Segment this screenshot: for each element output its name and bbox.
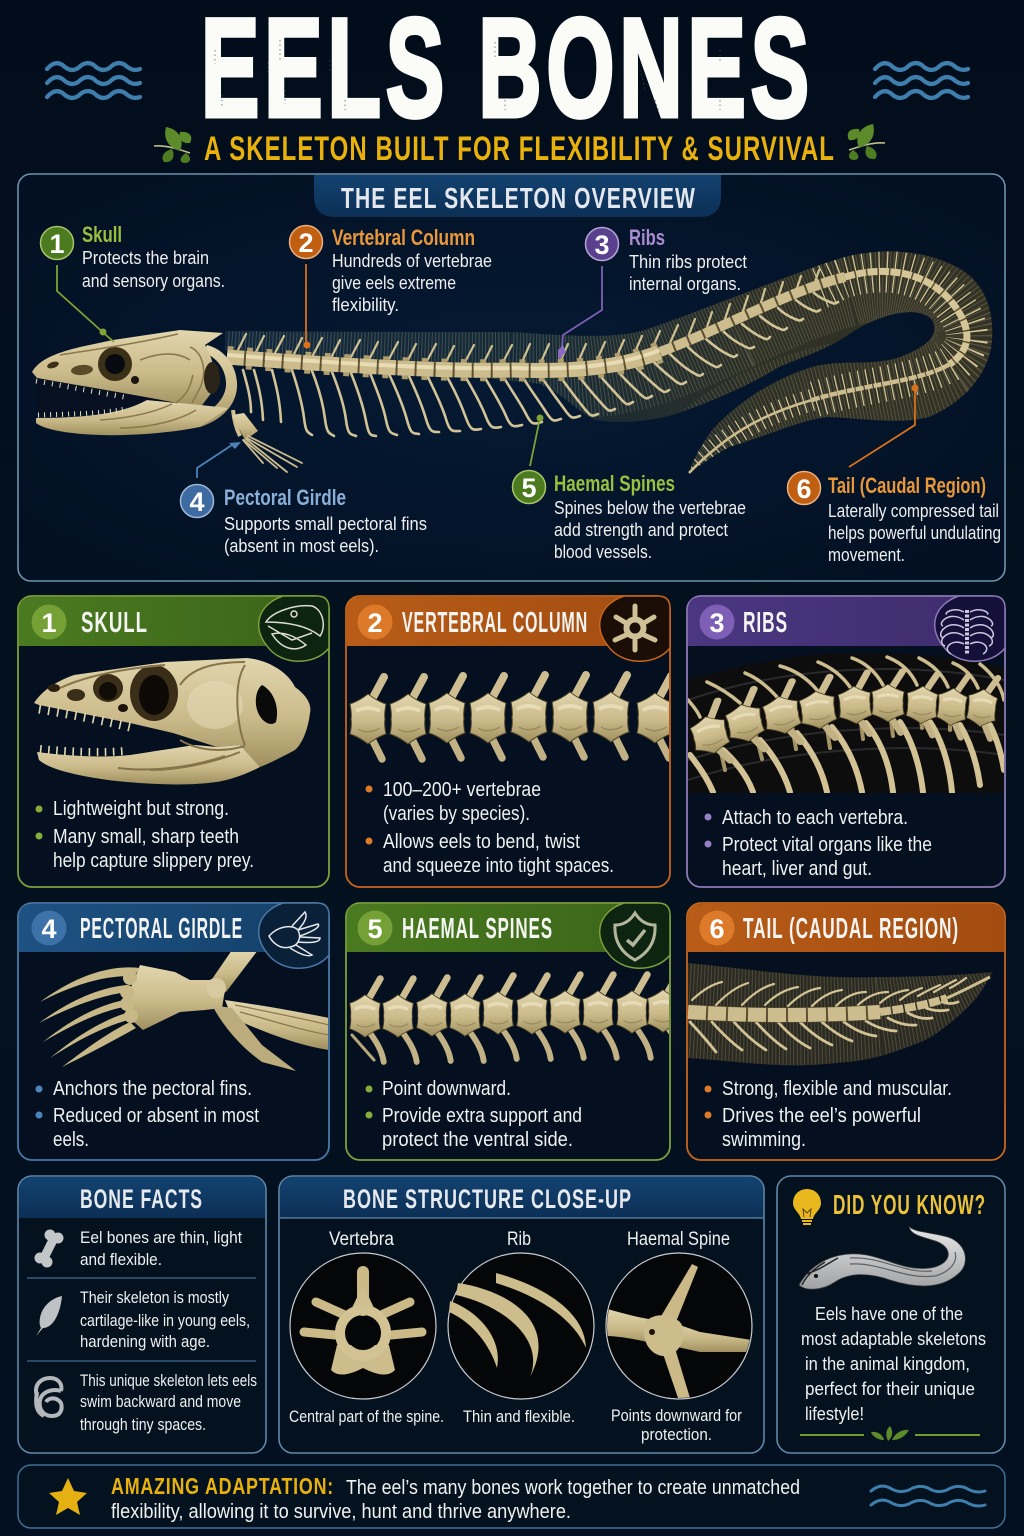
panel: skull card: 1 [41, 608, 57, 638]
did you know text: lifestyle! [805, 1404, 864, 1424]
pectoral image [39, 950, 329, 1071]
icon: banner waves [871, 1486, 985, 1506]
callout 6: tail: 6 [796, 474, 812, 504]
panel: vertebral column card [346, 596, 673, 887]
bullets: haemal spines: Provide extra support and [382, 1105, 582, 1127]
callout 1: skull: 1 [49, 229, 65, 259]
icon: eel [799, 1226, 965, 1289]
callout 1: skull: and sensory organs. [82, 271, 225, 291]
panel: haemal spines card: 5 [367, 914, 383, 944]
bullets: haemal spines: Point downward. [382, 1078, 511, 1100]
icon: leaves left [154, 127, 191, 163]
fact 3: through tiny spaces. [80, 1415, 206, 1434]
vertebrae image [350, 675, 673, 759]
pectoral girdle [232, 410, 302, 472]
vertebra close-up: Vertebra [329, 1229, 394, 1250]
heading: bone structure: BONE STRUCTURE CLOSE-UP [343, 1184, 632, 1214]
heading: vertebral column: VERTEBRAL COLUMN [402, 607, 588, 639]
haemal image [350, 974, 682, 1062]
bullets: pectoral girdle: eels. [53, 1129, 89, 1151]
panel: bone structure close-up [279, 1176, 764, 1453]
heading: skull: SKULL [81, 607, 148, 639]
callout 1: skull [40, 222, 225, 342]
vertebra close-up [289, 1229, 444, 1426]
bullets: skull: Lightweight but strong. [53, 798, 229, 820]
heading: bone facts: BONE FACTS [80, 1184, 203, 1214]
bullets: ribs [704, 807, 932, 880]
callout 3: ribs: Ribs [629, 225, 665, 250]
panel: skeleton overview [18, 174, 1005, 581]
fact 3: This unique skeleton lets eels [80, 1371, 257, 1390]
bullets: skull: Many small, sharp teeth [53, 826, 239, 848]
fact 2: Their skeleton is mostly [80, 1288, 229, 1307]
icon: bulb [793, 1189, 821, 1224]
callout 3: ribs: internal organs. [629, 274, 741, 294]
bullets: vertebral column: and squeeze into tight spaces. [383, 855, 614, 877]
icon: leaves right [848, 124, 885, 160]
bullets: pectoral girdle: Reduced or absent in most [53, 1105, 259, 1127]
panel: vertebral column card: 2 [367, 608, 383, 638]
eel skeleton [32, 251, 992, 473]
icon: coil [36, 1378, 62, 1416]
panel: haemal spines card [346, 903, 682, 1160]
did you know text: perfect for their unique [805, 1379, 975, 1399]
icon: feather [36, 1296, 62, 1336]
banner text: AMAZING ADAPTATION: [111, 1473, 334, 1499]
icon: fin [269, 912, 320, 956]
heading: overview: THE EEL SKELETON OVERVIEW [341, 183, 696, 215]
skull [32, 330, 237, 435]
callout 5: haemal spines [512, 414, 746, 562]
fact 2: cartilage-like in young eels, [80, 1311, 250, 1330]
tail image [688, 963, 993, 1065]
callout 6: tail: movement. [828, 545, 905, 565]
did you know text: Eels have one of the [815, 1304, 963, 1324]
neural spines [237, 270, 819, 362]
heading: ribs: RIBS [743, 607, 788, 639]
bullets: vertebral column: 100–200+ vertebrae [383, 779, 541, 801]
rib close-up: Rib [507, 1229, 531, 1250]
panel: did you know [777, 1176, 1005, 1453]
icon: skull line drawing [266, 606, 323, 649]
callout 2: vertebral column: give eels extreme [332, 273, 456, 293]
callout 6: tail: Laterally compressed tail [828, 501, 999, 521]
callout 3: ribs: Thin ribs protect [629, 252, 747, 272]
icon: divider leaves [871, 1426, 909, 1441]
panel: pectoral girdle card [18, 903, 329, 1160]
bullets: skull [36, 798, 254, 872]
bullets: pectoral girdle: Anchors the pectoral fins. [53, 1078, 252, 1100]
did you know text [801, 1304, 986, 1424]
heading: haemal spines: HAEMAL SPINES [402, 913, 553, 945]
heading: overview [314, 175, 721, 217]
waves right [875, 63, 968, 98]
bullets: tail: Strong, flexible and muscular. [722, 1078, 952, 1100]
icon: vertebra [615, 606, 655, 650]
icon: bone [34, 1230, 64, 1268]
haemal spine close-up: Points downward for [611, 1407, 742, 1425]
bullets: vertebral column: Allows eels to bend, twist [383, 831, 580, 853]
haemal spine close-up [604, 1229, 752, 1444]
callout 3: ribs: 3 [594, 230, 610, 260]
fact 1 [34, 1228, 242, 1269]
fact 1: Eel bones are thin, light [80, 1228, 242, 1247]
callout 2: vertebral column: Vertebral Column [332, 225, 475, 250]
callout 4: pectoral girdle: 4 [189, 487, 205, 517]
bullets: haemal spines [366, 1078, 582, 1151]
waves left [47, 63, 140, 98]
vertebra close-up: Central part of the spine. [289, 1408, 444, 1426]
callout 4: pectoral girdle [180, 442, 427, 556]
panel: tail card [687, 903, 1005, 1160]
callout 5: haemal spines: blood vessels. [554, 542, 652, 562]
panel: tail card: 6 [709, 914, 725, 944]
callout 5: haemal spines: Spines below the vertebrae [554, 498, 746, 518]
rib close-up: Thin and flexible. [463, 1408, 575, 1426]
callout 3: ribs [558, 225, 747, 360]
haemal spine close-up: Haemal Spine [627, 1229, 730, 1250]
panel: ribs card: 3 [709, 608, 725, 638]
bullets: tail: Drives the eel’s powerful [722, 1105, 921, 1127]
icon: ribcage [941, 610, 993, 654]
banner text: flexibility, allowing it to survive, hunt and thrive anywhere. [111, 1501, 571, 1523]
callout 1: skull: Protects the brain [82, 248, 209, 268]
callout 2: vertebral column: flexibility. [332, 295, 399, 315]
panel: skull card [18, 596, 329, 887]
panel: bone facts [18, 1176, 266, 1453]
bullets: tail [704, 1078, 952, 1151]
bullets: vertebral column: (varies by species). [383, 803, 530, 825]
skull image [34, 658, 310, 784]
icon: star [49, 1478, 87, 1515]
haemal spine close-up: protection. [641, 1426, 712, 1444]
callout 1: skull: Skull [82, 222, 122, 247]
callout 4: pectoral girdle: Pectoral Girdle [224, 485, 346, 510]
bullets: vertebral column [366, 779, 614, 877]
callout 4: pectoral girdle: (absent in most eels). [224, 536, 379, 556]
callout 6: tail [788, 384, 1001, 565]
ribs image [685, 653, 1004, 793]
fact 3 [36, 1371, 257, 1434]
bullets: tail: swimming. [722, 1129, 806, 1151]
panel: ribs card [685, 596, 1005, 887]
callout 5: haemal spines: add strength and protect [554, 520, 728, 540]
ribs [243, 293, 838, 436]
callout 4: pectoral girdle: Supports small pectoral fins [224, 514, 427, 534]
icon: shield check [615, 913, 655, 960]
banner text: The eel’s many bones work together to create unmatched [346, 1477, 800, 1499]
bullets: ribs: Protect vital organs like the [722, 834, 932, 856]
fact 2 [36, 1288, 250, 1351]
caudal ribs [689, 271, 967, 473]
banner text [111, 1473, 800, 1523]
vertebrae [227, 271, 967, 473]
bullets: pectoral girdle [36, 1078, 259, 1151]
bullets: ribs: heart, liver and gut. [722, 858, 872, 880]
did you know text: in the animal kingdom, [805, 1354, 970, 1374]
callout 2: vertebral column: 2 [298, 228, 314, 258]
callout 2: vertebral column [290, 225, 492, 348]
panel: amazing adaptation banner [18, 1465, 1005, 1528]
heading: pectoral girdle: PECTORAL GIRDLE [80, 913, 243, 945]
bullets: haemal spines: protect the ventral side. [382, 1129, 573, 1151]
fact 2: hardening with age. [80, 1332, 210, 1351]
bullets: ribs: Attach to each vertebra. [722, 807, 908, 829]
fact 1: and flexible. [80, 1250, 162, 1269]
bullets: skull: help capture slippery prey. [53, 850, 254, 872]
callout 5: haemal spines: Haemal Spines [554, 471, 675, 496]
panel: pectoral girdle card: 4 [41, 914, 57, 944]
callout 2: vertebral column: Hundreds of vertebrae [332, 251, 492, 271]
rib close-up [448, 1229, 594, 1426]
fact 3: swim backward and move [80, 1392, 241, 1411]
callout 5: haemal spines: 5 [521, 473, 537, 503]
did you know text: most adaptable skeletons [801, 1329, 986, 1349]
